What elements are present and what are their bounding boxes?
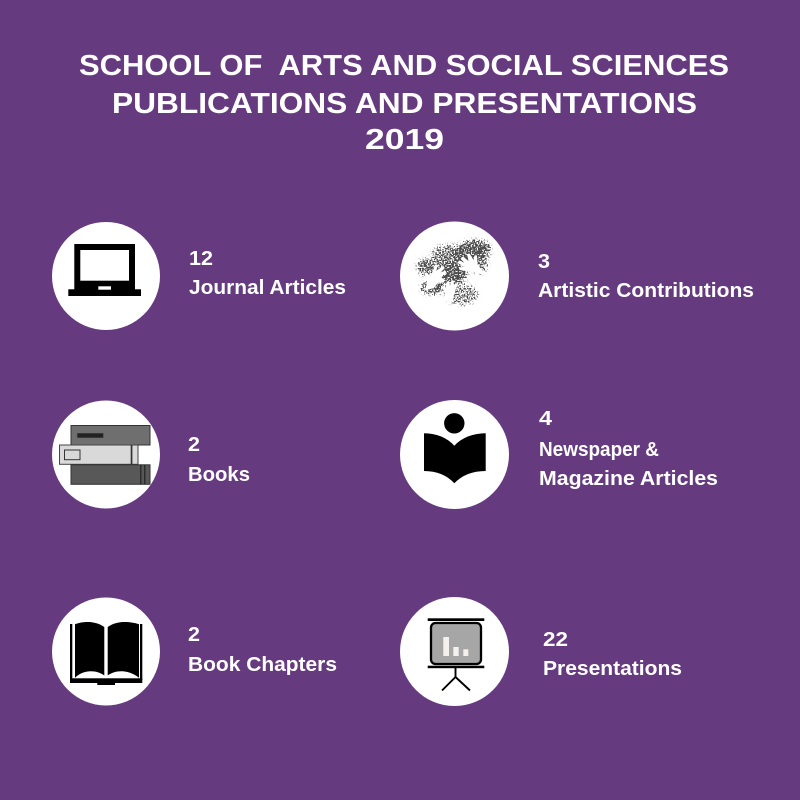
panel: newspaper and magazine articles bbox=[400, 400, 718, 509]
title bbox=[79, 50, 729, 156]
text: books count and label bbox=[188, 433, 250, 486]
text: newspaper and magazine count and label bbox=[539, 407, 718, 490]
panel: artistic contributions bbox=[400, 222, 754, 330]
text: journal articles count and label bbox=[189, 247, 346, 299]
panel: presentations bbox=[400, 597, 682, 706]
text: books count and label: Books bbox=[188, 463, 250, 486]
text: presentations count and label: Presentations bbox=[543, 657, 682, 680]
text: artistic contributions count and label bbox=[538, 250, 754, 302]
text: books count and label: 2 bbox=[188, 433, 200, 456]
text: newspaper and magazine count and label: Magazine Articles bbox=[539, 467, 718, 490]
panel: books bbox=[52, 400, 250, 508]
text: book chapters count and label: 2 bbox=[188, 623, 200, 646]
text: book chapters count and label: Book Chapters bbox=[188, 653, 337, 676]
text: journal articles count and label: 12 bbox=[189, 247, 213, 270]
icon: projector screen with chart bbox=[400, 597, 509, 706]
icon: laptop bbox=[52, 222, 160, 330]
icon: reader with open book bbox=[400, 400, 509, 509]
text: journal articles count and label: Journal Articles bbox=[189, 276, 346, 299]
icon: speckled hands bbox=[400, 222, 509, 330]
title: PUBLICATIONS AND PRESENTATIONS bbox=[112, 88, 697, 120]
icon: stack of books bbox=[52, 400, 160, 508]
text: book chapters count and label bbox=[188, 623, 337, 676]
title: SCHOOL OF ARTS AND SOCIAL SCIENCES bbox=[79, 50, 729, 82]
panel: book chapters bbox=[52, 598, 337, 706]
title: 2019 bbox=[365, 124, 444, 156]
text: newspaper and magazine count and label: Newspaper & bbox=[539, 438, 659, 461]
panel: journal articles bbox=[52, 222, 346, 330]
text: presentations count and label bbox=[543, 628, 682, 680]
text: newspaper and magazine count and label: 4 bbox=[539, 407, 553, 430]
text: artistic contributions count and label: 3 bbox=[538, 250, 550, 273]
icon: open book bbox=[52, 598, 160, 706]
text: presentations count and label: 22 bbox=[543, 628, 568, 651]
text: artistic contributions count and label: Artistic Contributions bbox=[538, 279, 754, 302]
